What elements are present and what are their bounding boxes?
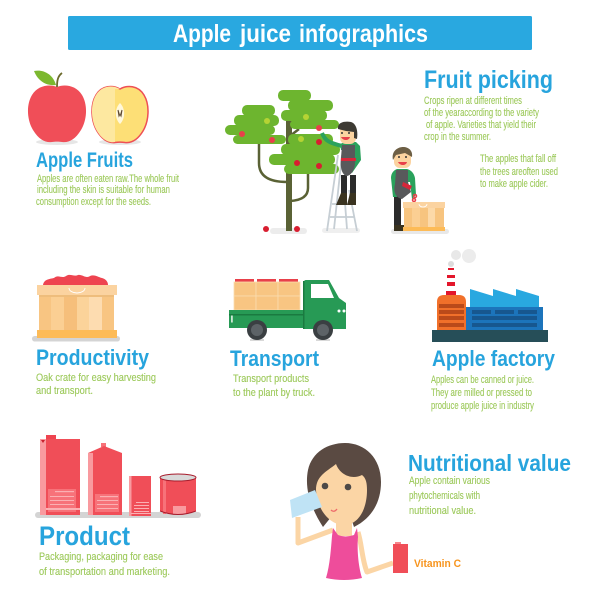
text: nutritional description: Apple contain various xyxy=(409,475,490,487)
text: transport description: to the plant by truck. xyxy=(233,387,315,399)
heading: Apple factory: Apple factory xyxy=(432,346,556,371)
heading: Fruit picking: Fruit picking xyxy=(424,66,553,94)
text: crops ripen: crop in the summer. xyxy=(424,131,491,143)
text: product description: of transportation and marketing. xyxy=(39,566,170,578)
text: apple fruits description: Apples are often eaten raw.The whole fruit xyxy=(37,173,179,185)
title banner: Apple xyxy=(173,20,231,48)
text: crops ripen xyxy=(424,95,539,143)
panel: product xyxy=(35,435,201,578)
icon: apple crate xyxy=(32,275,120,342)
panel: productivity xyxy=(32,275,156,397)
illustration: woman drinking juice xyxy=(290,443,393,580)
illustration: picker with crate xyxy=(391,147,449,234)
text: nutritional description xyxy=(409,475,490,517)
text: transport description xyxy=(233,373,315,399)
heading: Apple Fruits: Apple Fruits xyxy=(36,149,133,172)
heading: Productivity: Productivity xyxy=(36,345,150,370)
text: apple fruits description xyxy=(36,173,179,208)
icon: juice box xyxy=(393,542,408,573)
icon: halved apple xyxy=(92,87,148,145)
text: productivity description xyxy=(36,372,156,397)
panel: transport xyxy=(229,279,346,399)
text: crops ripen: Crops ripen at different times xyxy=(424,95,522,107)
text: product description xyxy=(39,551,170,578)
text: factory description xyxy=(431,374,534,412)
label: Vitamin C: Vitamin C xyxy=(414,558,461,570)
text: nutritional description: nutritional value. xyxy=(409,505,476,517)
text: crops ripen: of apple. Varieties that yield their xyxy=(426,119,536,131)
illustration: apple tree xyxy=(225,90,340,234)
title banner: juice xyxy=(239,20,291,48)
text: crops ripen: of the yearaccording to the variety xyxy=(424,107,539,119)
text: fallen apples: to make apple cider. xyxy=(480,178,548,190)
panel: apple factory xyxy=(431,249,556,412)
text: apple fruits description: consumption except for the seeds. xyxy=(36,196,151,208)
panel: fruit picking text xyxy=(424,66,558,190)
icon: whole red apple xyxy=(28,71,86,145)
text: factory description: Apples can be canned or juice. xyxy=(431,374,534,386)
title banner: infographics xyxy=(299,20,428,48)
text: factory description: produce apple juice in industry xyxy=(431,400,534,412)
heading: Product: Product xyxy=(39,521,130,551)
text: nutritional description: phytochemicals with xyxy=(409,490,480,502)
text: fallen apples: The apples that fall off xyxy=(480,153,557,165)
text: fallen apples: the trees areoften used xyxy=(480,166,558,178)
title banner xyxy=(68,16,532,50)
heading: Nutritional value: Nutritional value xyxy=(408,450,571,476)
icon: packaging row xyxy=(35,435,201,518)
text: apple fruits description: including the skin is suitable for human xyxy=(37,184,170,196)
panel: apple fruits xyxy=(28,71,179,208)
text: fallen apples xyxy=(480,153,558,190)
panel: nutritional value text xyxy=(408,450,571,517)
heading: Transport: Transport xyxy=(230,346,320,371)
text: productivity description: Oak crate for easy harvesting xyxy=(36,372,156,384)
icon: factory xyxy=(432,249,548,342)
text: factory description: They are milled or pressed to xyxy=(431,387,532,399)
text: transport description: Transport products xyxy=(233,373,309,385)
text: product description: Packaging, packaging for ease xyxy=(39,551,163,563)
illustration: picker on ladder xyxy=(322,122,361,233)
icon: truck with crates xyxy=(229,279,346,341)
text: productivity description: and transport. xyxy=(36,385,93,397)
